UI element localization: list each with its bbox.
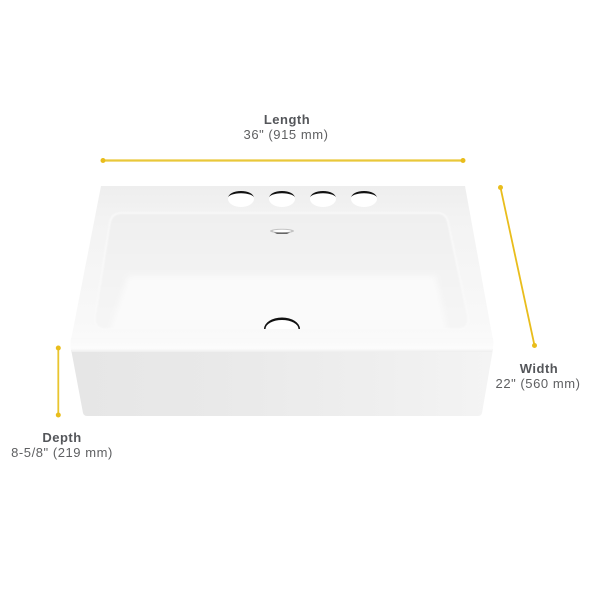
bottom drain <box>264 318 300 329</box>
overflow drain <box>270 229 294 234</box>
depth heading: Depth <box>42 430 82 445</box>
sink top deck <box>70 186 493 350</box>
length value: 36" (915 mm) <box>244 127 328 142</box>
basin <box>95 213 468 335</box>
length line <box>100 158 466 163</box>
basin interior <box>95 213 468 329</box>
depth line <box>56 346 61 418</box>
dimension: width <box>496 185 580 391</box>
faucet holes <box>228 191 377 207</box>
front rim highlight <box>71 338 493 352</box>
dimension: depth <box>11 346 113 460</box>
length heading: Length <box>264 112 310 127</box>
hole 3 <box>310 191 336 207</box>
hole 2 <box>269 191 295 207</box>
hole 4 <box>351 191 377 207</box>
sink <box>70 186 493 416</box>
hole 1 <box>228 191 254 207</box>
width heading: Width <box>520 361 558 376</box>
depth value: 8-5/8" (219 mm) <box>11 445 113 460</box>
width value: 22" (560 mm) <box>496 376 580 391</box>
basin floor <box>108 276 448 335</box>
sink front apron <box>71 349 493 416</box>
width line <box>498 185 537 348</box>
dimension: length <box>100 112 466 163</box>
